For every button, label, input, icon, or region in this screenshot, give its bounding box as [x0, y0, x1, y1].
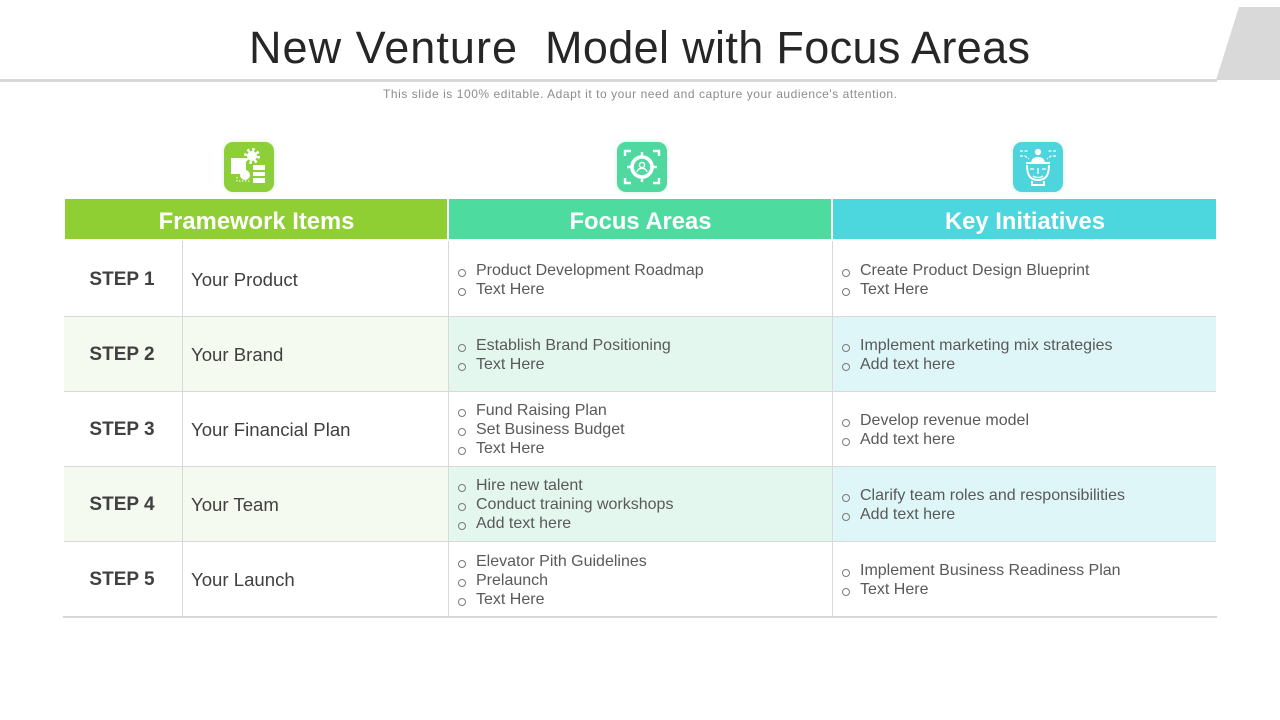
band: step 2 focus — [448, 317, 832, 392]
focus list: step 4: Hire new talent Conduct training workshops Add text here — [476, 477, 673, 532]
subtitle: This slide is 100% editable. Adapt it to your need and capture your audience's attention. — [383, 87, 897, 101]
column header: Focus Areas — [449, 199, 831, 239]
column header: Framework Items: Framework Items — [159, 208, 354, 235]
step 3 label: STEP 3 — [89, 419, 155, 440]
title: New Venture — [249, 22, 517, 73]
icon: focus areas — [617, 142, 667, 192]
step 1 label: STEP 1 — [89, 269, 155, 290]
step 3 item: Your Financial Plan — [191, 419, 351, 440]
title: Model with Focus Areas — [545, 22, 1030, 73]
icon: framework items — [224, 142, 274, 192]
step 4 item: Your Team — [191, 494, 279, 515]
band: step 2 framework — [64, 317, 448, 392]
corner shape — [1216, 7, 1280, 80]
band: step 2 initiatives — [832, 317, 1216, 392]
initiatives list: step 4: Clarify team roles and responsibilities Add text here — [860, 487, 1125, 523]
column header: Focus Areas: Focus Areas — [570, 208, 711, 235]
band: step 4 focus — [448, 467, 832, 542]
step 1 item: Your Product — [191, 269, 298, 290]
initiatives list: step 5: Implement Business Readiness Plan Text Here — [860, 562, 1121, 598]
header rule — [0, 79, 1217, 82]
initiatives list: step 2: Implement marketing mix strategies Add text here — [860, 337, 1113, 373]
column header: Key Initiatives — [833, 199, 1216, 239]
step 2 item: Your Brand — [191, 344, 283, 365]
column header: Key Initiatives: Key Initiatives — [945, 208, 1105, 235]
initiatives list: step 3: Develop revenue model Add text here — [860, 412, 1029, 448]
focus list: step 3: Fund Raising Plan Set Business Budget Text Here — [476, 402, 625, 457]
title — [249, 22, 1030, 73]
step 5 item: Your Launch — [191, 569, 295, 590]
band: step 4 initiatives — [832, 467, 1216, 542]
step 2 label: STEP 2 — [89, 344, 155, 365]
column header: Framework Items — [65, 199, 447, 239]
icon: key initiatives — [1013, 142, 1063, 192]
step 5 label: STEP 5 — [89, 569, 155, 590]
step 4 label: STEP 4 — [89, 494, 155, 515]
focus list: step 5: Elevator Pith Guidelines Prelaunch Text Here — [476, 553, 647, 608]
initiatives list: step 1: Create Product Design Blueprint Text Here — [860, 262, 1089, 298]
focus list: step 1: Product Development Roadmap Text Here — [476, 262, 704, 298]
focus list: step 2: Establish Brand Positioning Text Here — [476, 337, 671, 373]
band: step 4 framework — [64, 467, 448, 542]
